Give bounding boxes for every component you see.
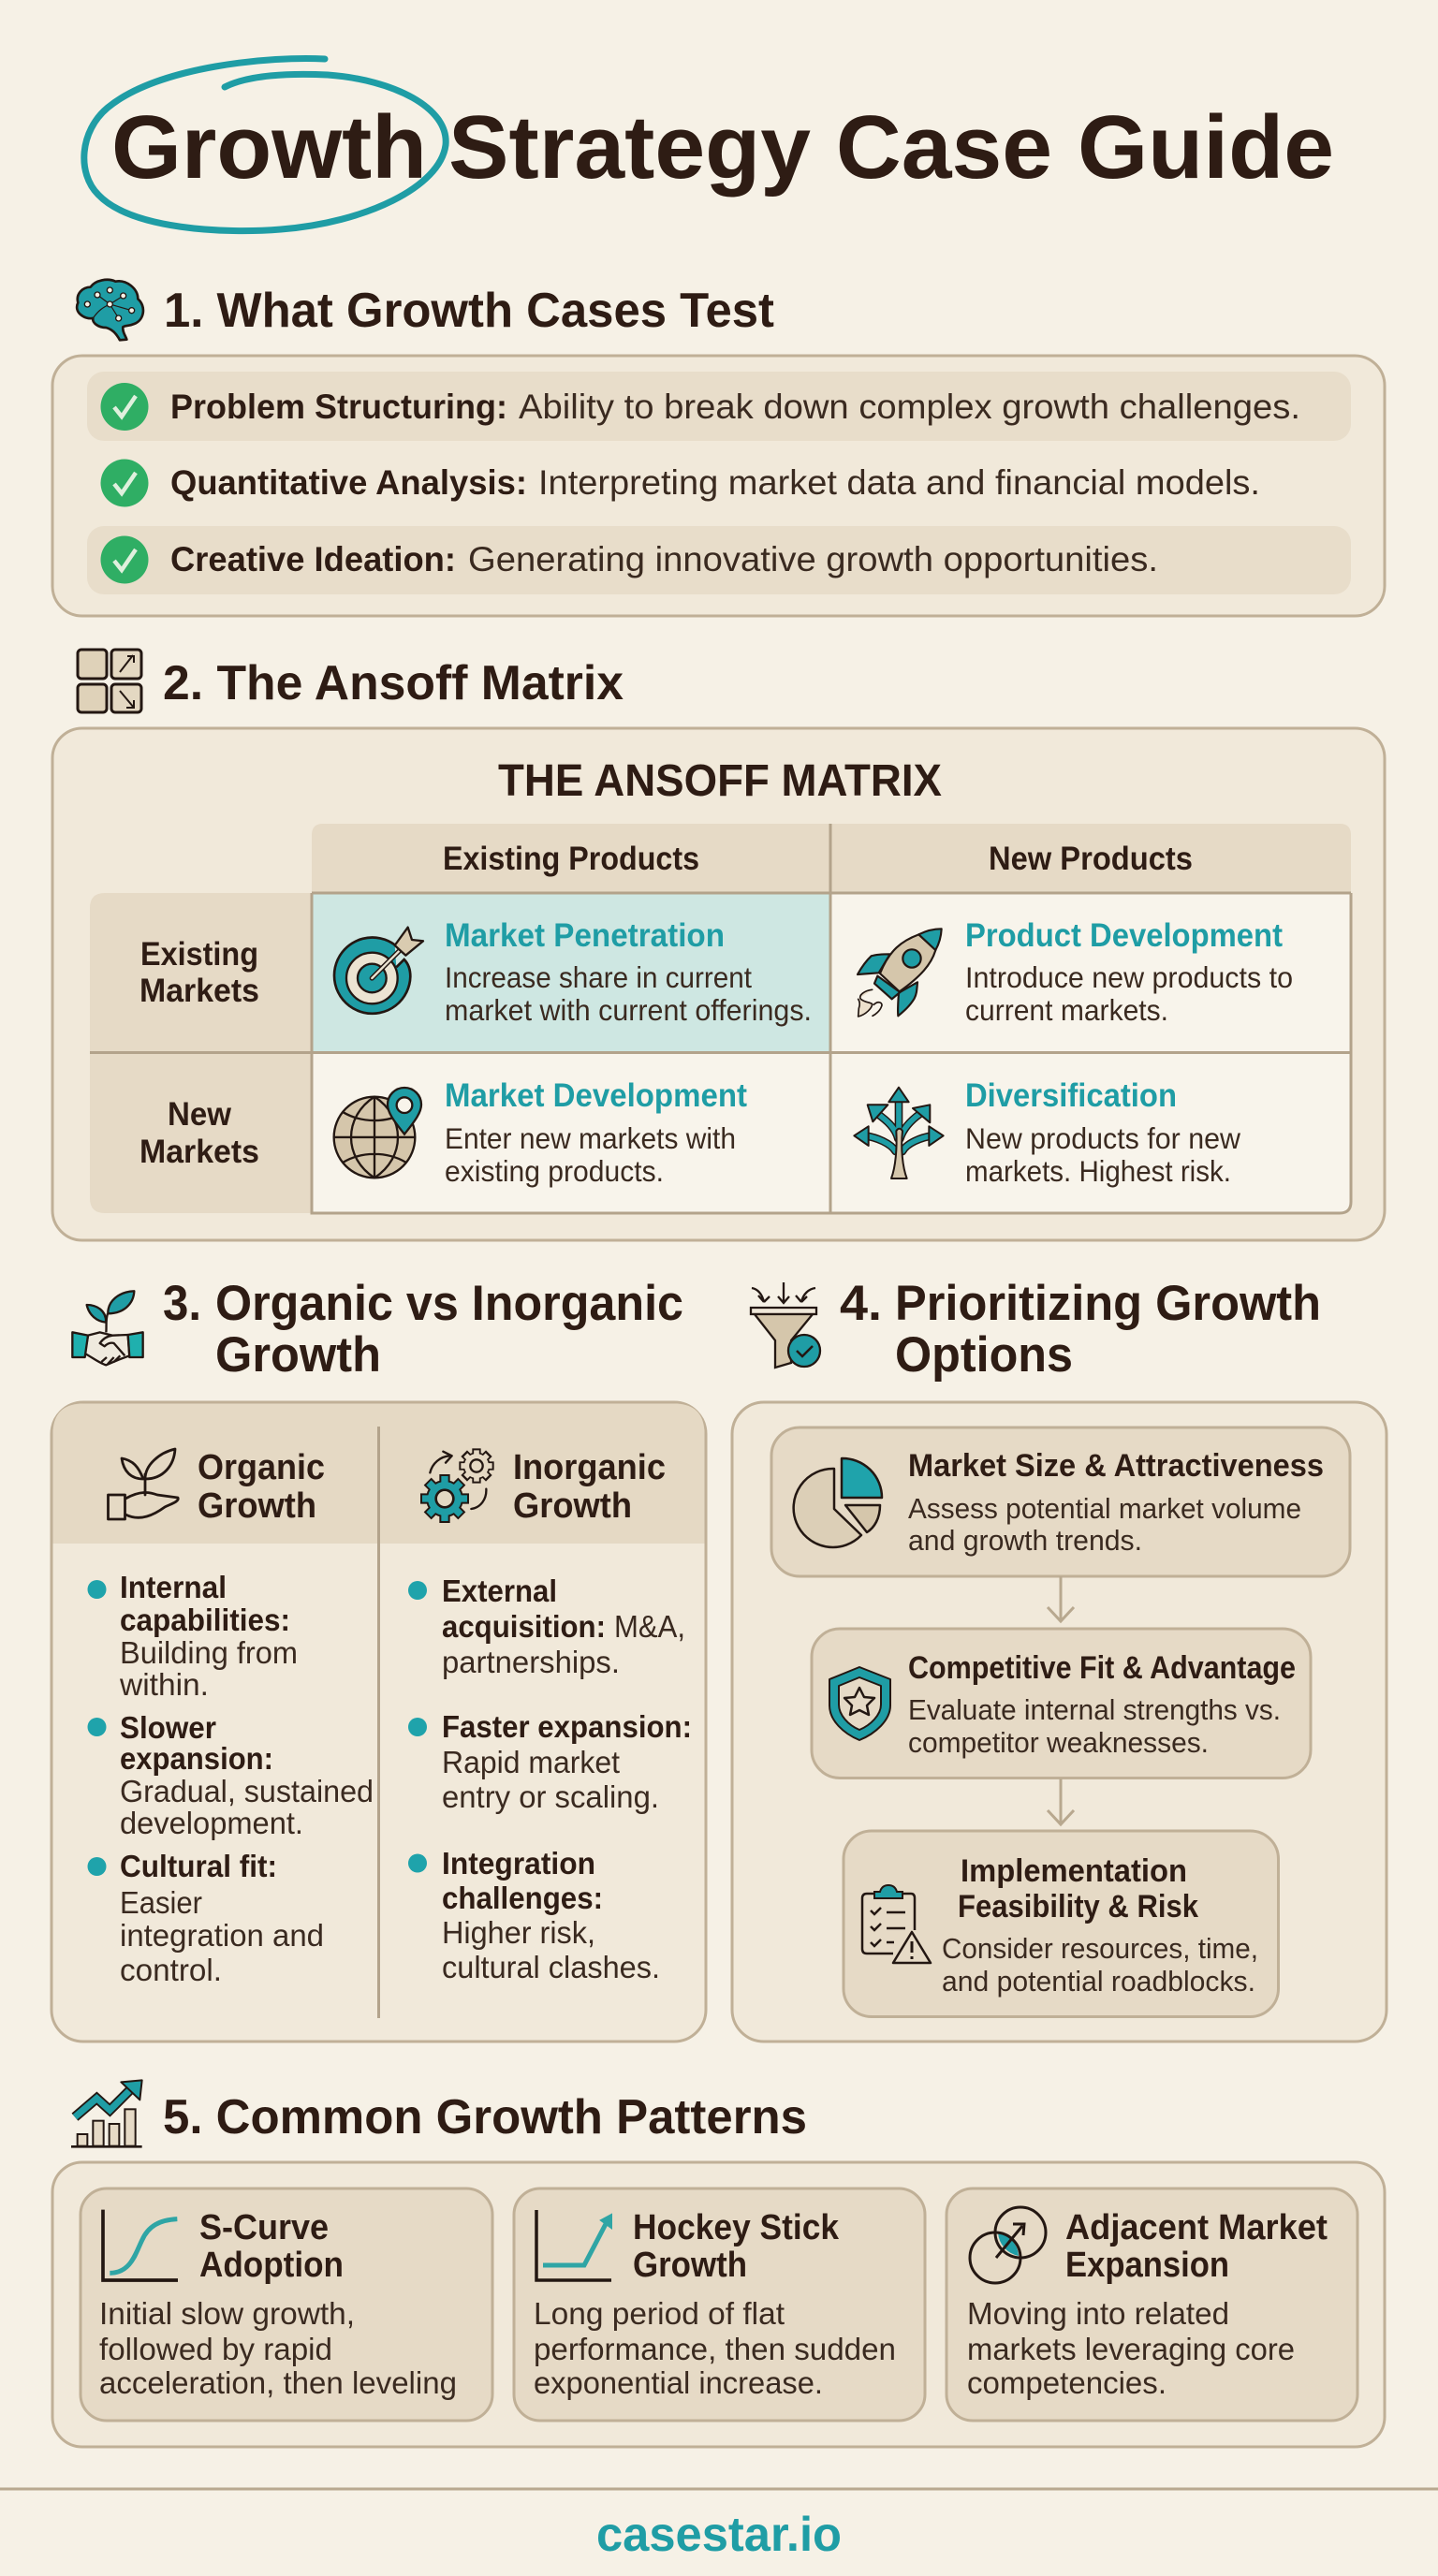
row headers: Markets [139, 973, 259, 1009]
column: organic growth: Organic [198, 1448, 325, 1487]
column: organic growth: capabilities: [120, 1603, 290, 1637]
column: inorganic growth: Faster expansion: [442, 1709, 692, 1744]
row: problem structuring: Problem Structuring: [170, 388, 507, 426]
column headers: Existing Products [443, 841, 699, 877]
cell: product development: Product Development [965, 917, 1283, 954]
icon: s-curve chart [103, 2210, 178, 2280]
column: inorganic growth: challenges: [442, 1881, 603, 1915]
title [84, 59, 1334, 231]
icon: clipboard with warning [862, 1885, 931, 1963]
step: market size [771, 1427, 1350, 1576]
column: inorganic growth: Higher risk, [442, 1915, 595, 1950]
column: organic growth: Gradual, sustained [120, 1774, 374, 1808]
step: competitive fit: Evaluate internal strengths vs. [908, 1693, 1281, 1726]
cell: diversification: markets. Highest risk. [965, 1154, 1231, 1188]
column: organic growth: Easier [120, 1885, 202, 1920]
cell: product development: current markets. [965, 993, 1168, 1027]
cell: product development [858, 917, 1293, 1027]
cell: market penetration [334, 917, 812, 1027]
icon: matrix grid [78, 650, 141, 712]
step: implementation: and potential roadblocks. [942, 1965, 1255, 1998]
matrix cells background [312, 893, 1351, 1213]
column: organic growth: Building from [120, 1635, 298, 1670]
column: inorganic growth: External [442, 1573, 557, 1608]
arrow [1048, 1778, 1074, 1824]
card: hockey stick: Long period of flat [534, 2296, 785, 2331]
card: adjacent market: markets leveraging core [967, 2332, 1295, 2366]
cell: market penetration: Market Penetration [445, 917, 725, 954]
card: s-curve: S-Curve [199, 2208, 329, 2247]
step: implementation: Implementation [961, 1853, 1187, 1889]
column: inorganic growth: Integration [442, 1846, 595, 1881]
icon: rocket [858, 929, 942, 1017]
icon: branching arrows [854, 1088, 944, 1178]
column: inorganic growth: M&A, [614, 1609, 685, 1644]
icon: hockey stick chart [536, 2210, 611, 2280]
column: inorganic growth: acquisition: [442, 1609, 606, 1644]
section heading 3: 3. [163, 1276, 201, 1331]
section heading 3 [163, 1276, 683, 1383]
row: creative ideation: Creative Ideation: [170, 540, 456, 578]
icon: venn diagram [970, 2207, 1046, 2283]
column headers: New Products [989, 841, 1193, 877]
column: inorganic growth: Rapid market [442, 1745, 620, 1779]
header band [52, 1404, 704, 1544]
title circle highlight [84, 59, 446, 231]
section heading 4: 4. [840, 1276, 882, 1331]
panel: ansoff matrix [52, 728, 1385, 1240]
row: problem structuring: Ability to break down complex growth challenges. [519, 388, 1300, 426]
cell: market penetration: Increase share in current [445, 960, 752, 994]
step: implementation: Feasibility & Risk [958, 1889, 1198, 1925]
row headers: Existing [140, 936, 258, 973]
row: quantitative analysis: Quantitative Analysis: [170, 463, 527, 502]
section heading 1: 1. What Growth Cases Test [164, 284, 774, 338]
column headers [312, 824, 1351, 893]
section heading 2: 2. The Ansoff Matrix [163, 656, 624, 710]
column: organic growth: Internal [120, 1570, 227, 1604]
column: inorganic growth: partnerships. [442, 1645, 620, 1679]
card: hockey stick [514, 2188, 925, 2421]
column: organic growth: Slower [120, 1710, 216, 1745]
step: competitive fit: Competitive Fit & Advantage [908, 1650, 1296, 1686]
cell: market development: existing products. [445, 1154, 664, 1188]
card: s-curve: followed by rapid [99, 2332, 332, 2366]
card: hockey stick: exponential increase. [534, 2365, 823, 2400]
cell: diversification: New products for new [965, 1121, 1240, 1155]
icon: funnel [751, 1282, 820, 1368]
arrow [1048, 1576, 1074, 1621]
title: Growth [111, 97, 427, 198]
cell: market development: Enter new markets with [445, 1121, 736, 1155]
row headers: Markets [139, 1134, 259, 1170]
column: organic growth: integration and [120, 1918, 324, 1953]
column: inorganic growth: entry or scaling. [442, 1779, 659, 1814]
card: s-curve [81, 2188, 492, 2421]
title: Strategy Case Guide [448, 97, 1334, 198]
section heading 4: Options [895, 1327, 1073, 1383]
card: adjacent market [946, 2188, 1357, 2421]
column: inorganic growth: Inorganic [513, 1448, 666, 1487]
step: competitive fit [812, 1629, 1311, 1778]
column: organic growth: Cultural fit: [120, 1849, 277, 1883]
column: organic growth: within. [119, 1667, 209, 1702]
card: adjacent market: competencies. [967, 2365, 1167, 2400]
section heading 5: 5. Common Growth Patterns [163, 2090, 807, 2144]
row headers [90, 893, 312, 1213]
row: quantitative analysis: Interpreting market data and financial models. [538, 463, 1260, 502]
card: hockey stick: Hockey Stick [633, 2208, 840, 2247]
step: market size: and growth trends. [908, 1524, 1142, 1557]
row: problem structuring [87, 372, 1351, 441]
icon: hand with sprout [109, 1449, 178, 1519]
icon: pie chart [794, 1458, 882, 1547]
step: competitive fit: competitor weaknesses. [908, 1726, 1209, 1759]
column: organic growth [88, 1448, 374, 1987]
row: creative ideation [87, 526, 1351, 594]
card: adjacent market: Adjacent Market [1065, 2208, 1328, 2247]
card: s-curve: Initial slow growth, [99, 2296, 355, 2331]
row: creative ideation: Generating innovative growth opportunities. [468, 540, 1158, 578]
column: organic growth: development. [120, 1806, 303, 1840]
card: adjacent market: Expansion [1065, 2246, 1229, 2285]
column: inorganic growth: cultural clashes. [442, 1950, 660, 1984]
icon: sprout and handshake [72, 1291, 143, 1365]
card: s-curve: Adoption [199, 2246, 344, 2285]
icon: growth chart [71, 2080, 142, 2146]
column: inorganic growth [408, 1448, 692, 1984]
panel: prioritizing options [732, 1402, 1387, 2042]
row headers: New [168, 1096, 232, 1133]
card: adjacent market: Moving into related [967, 2296, 1229, 2331]
cell: market development [334, 1077, 747, 1188]
step: market size: Market Size & Attractiveness [908, 1448, 1324, 1484]
footer brand: casestar.io [596, 2508, 842, 2562]
column: organic growth: Growth [198, 1486, 316, 1526]
section heading 4: Prioritizing Growth [895, 1276, 1321, 1331]
cell: market development: Market Development [445, 1077, 747, 1114]
step: implementation: Consider resources, time, [942, 1932, 1258, 1965]
cell: product development: Introduce new products to [965, 960, 1293, 994]
card: hockey stick: performance, then sudden [534, 2332, 896, 2366]
cell: market penetration: market with current offerings. [445, 993, 812, 1027]
matrix title: THE ANSOFF MATRIX [498, 756, 942, 806]
icon: target [334, 928, 423, 1014]
column: organic growth: control. [120, 1953, 222, 1987]
card: s-curve: acceleration, then leveling [99, 2365, 457, 2400]
section heading 4 [840, 1276, 1321, 1383]
row: quantitative analysis [101, 459, 1260, 507]
icon: brain [77, 280, 143, 340]
panel: organic vs inorganic [51, 1402, 706, 2042]
panel: common growth patterns [52, 2162, 1385, 2447]
cell: diversification [854, 1077, 1240, 1188]
column: inorganic growth: Growth [513, 1486, 632, 1526]
panel: what growth cases test [52, 356, 1385, 616]
cell: diversification: Diversification [965, 1077, 1177, 1114]
step: market size: Assess potential market volume [908, 1492, 1301, 1525]
icon: gears [420, 1448, 494, 1523]
step: implementation [844, 1831, 1279, 2016]
icon: shield [829, 1667, 890, 1740]
icon: globe with pin [334, 1088, 421, 1178]
card: hockey stick: Growth [633, 2246, 747, 2285]
section heading 3: Growth [215, 1327, 381, 1383]
column: organic growth: expansion: [120, 1741, 273, 1776]
section heading 3: Organic vs Inorganic [215, 1276, 683, 1331]
